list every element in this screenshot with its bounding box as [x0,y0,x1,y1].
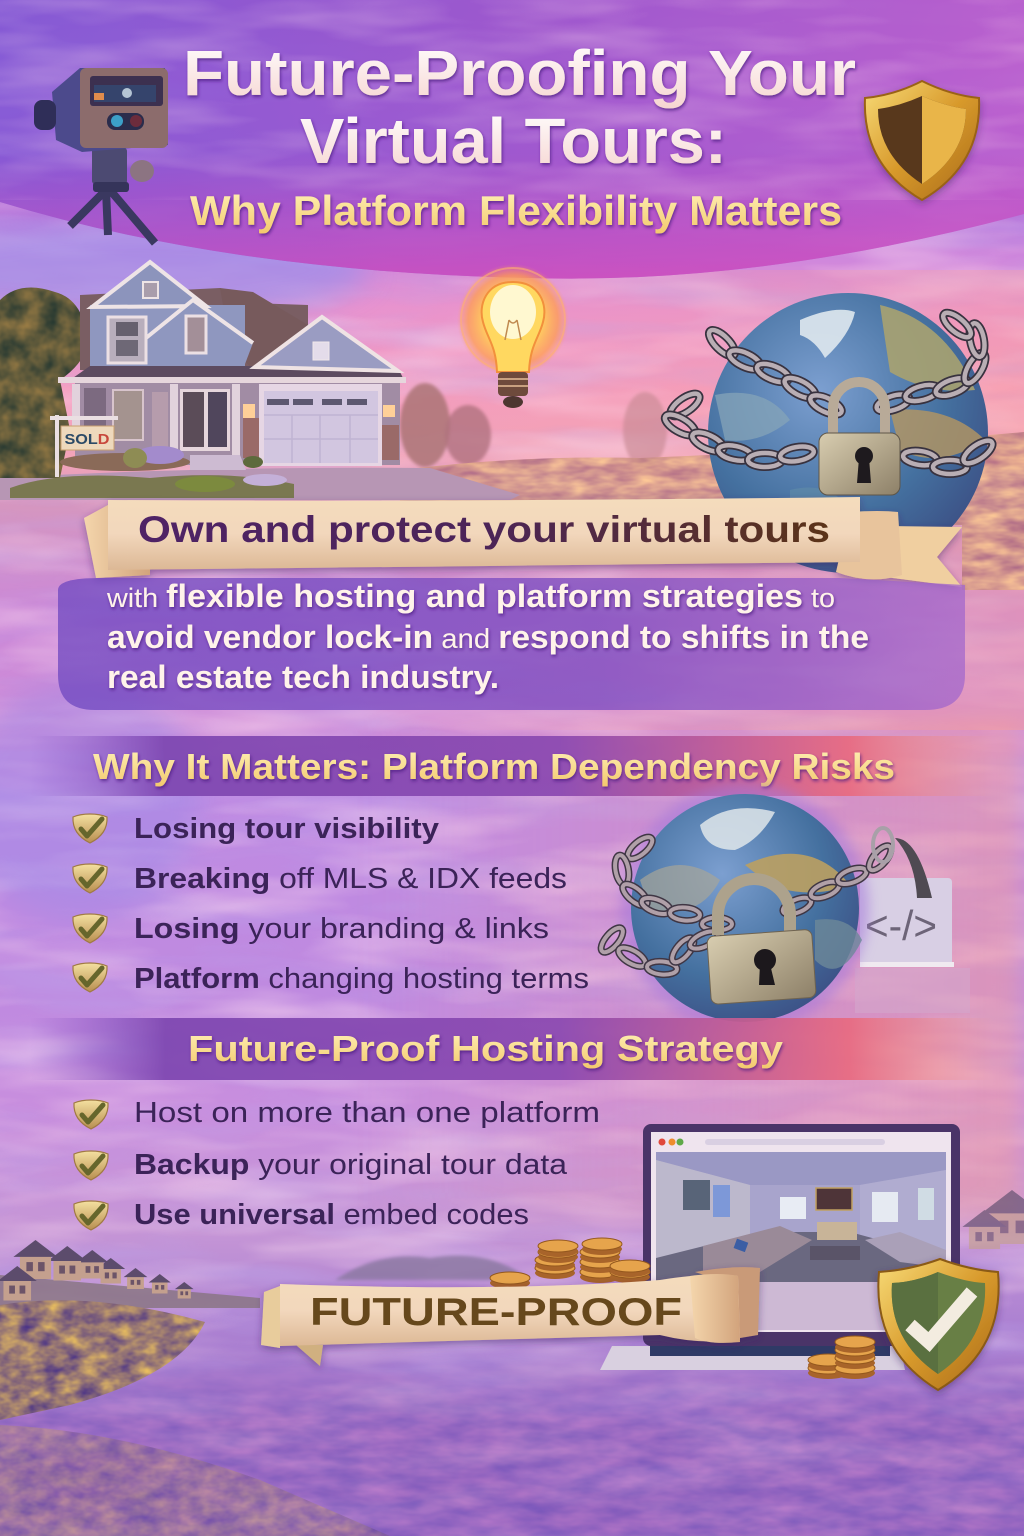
bushes foreground left [0,1300,205,1420]
risk 3: Losing your branding & links [134,913,549,945]
header arch band [0,0,1024,279]
trees left of the house [0,288,80,478]
title: Virtual Tours: [300,105,727,177]
panel: flexible hosting intro: avoid vendor lock-in and respond to shifts in the [107,619,869,655]
house with sold sign [10,262,406,498]
foreground meadow [400,432,1024,590]
title: Future-Proofing Your [183,37,856,109]
laptop with virtual tour [600,1124,960,1370]
icon: gold shield [865,81,979,200]
distant trees [400,383,667,468]
strategy checklist [74,1097,600,1231]
icon: locked globe with embed code card [597,784,970,1032]
risk 2: Breaking off MLS & IDX feeds [134,863,567,895]
village left [0,1240,260,1308]
far hedge centre [335,1256,530,1280]
padlock [707,879,816,1004]
strategy 1: Host on more than one platform [134,1097,600,1129]
panel: flexible hosting intro: real estate tech industry. [107,659,499,695]
section band: hosting strategy [30,1018,994,1080]
chain links [597,833,895,976]
subtitle: Why Platform Flexibility Matters [190,187,842,234]
icon: locked globe with embed code card: <-/> [865,902,937,949]
title [183,37,856,177]
sold sign [50,415,118,477]
icon: 360 camera on tripod [34,68,168,243]
coin stacks [490,1238,650,1289]
icon: green check shield [878,1259,999,1390]
room interior [656,1152,946,1282]
risks checklist [73,813,589,995]
section band: platform dependency risks [30,736,994,796]
section band: hosting strategy: Future-Proof Hosting Strategy [188,1028,783,1069]
ribbon: own and protect [84,497,962,587]
panel: flexible hosting intro: with flexible hosting and platform strategies to [106,578,835,614]
risk 4: Platform changing hosting terms [134,963,589,995]
chain links [662,309,996,474]
coin stack by laptop [808,1336,875,1379]
ribbon: future-proof [261,1267,760,1366]
ribbon heading text: Own and protect your virtual tours [138,509,830,550]
padlock [819,382,900,495]
ribbon text: FUTURE-PROOF [310,1291,682,1334]
lawn strip [0,468,520,500]
lavender bushes lower left [0,1420,400,1536]
panel: flexible hosting intro [58,578,965,710]
section band: platform dependency risks: Why It Matters: Platform Dependency Risks [93,746,895,787]
risk 1: Losing tour visibility [134,813,439,845]
sold sign: SOLD [64,431,110,448]
icon: lightbulb [457,264,569,408]
icon: chained globe [662,293,996,573]
strategy 2: Backup your original tour data [134,1149,568,1181]
village right [962,1190,1024,1249]
strategy 3: Use universal embed codes [134,1199,529,1231]
